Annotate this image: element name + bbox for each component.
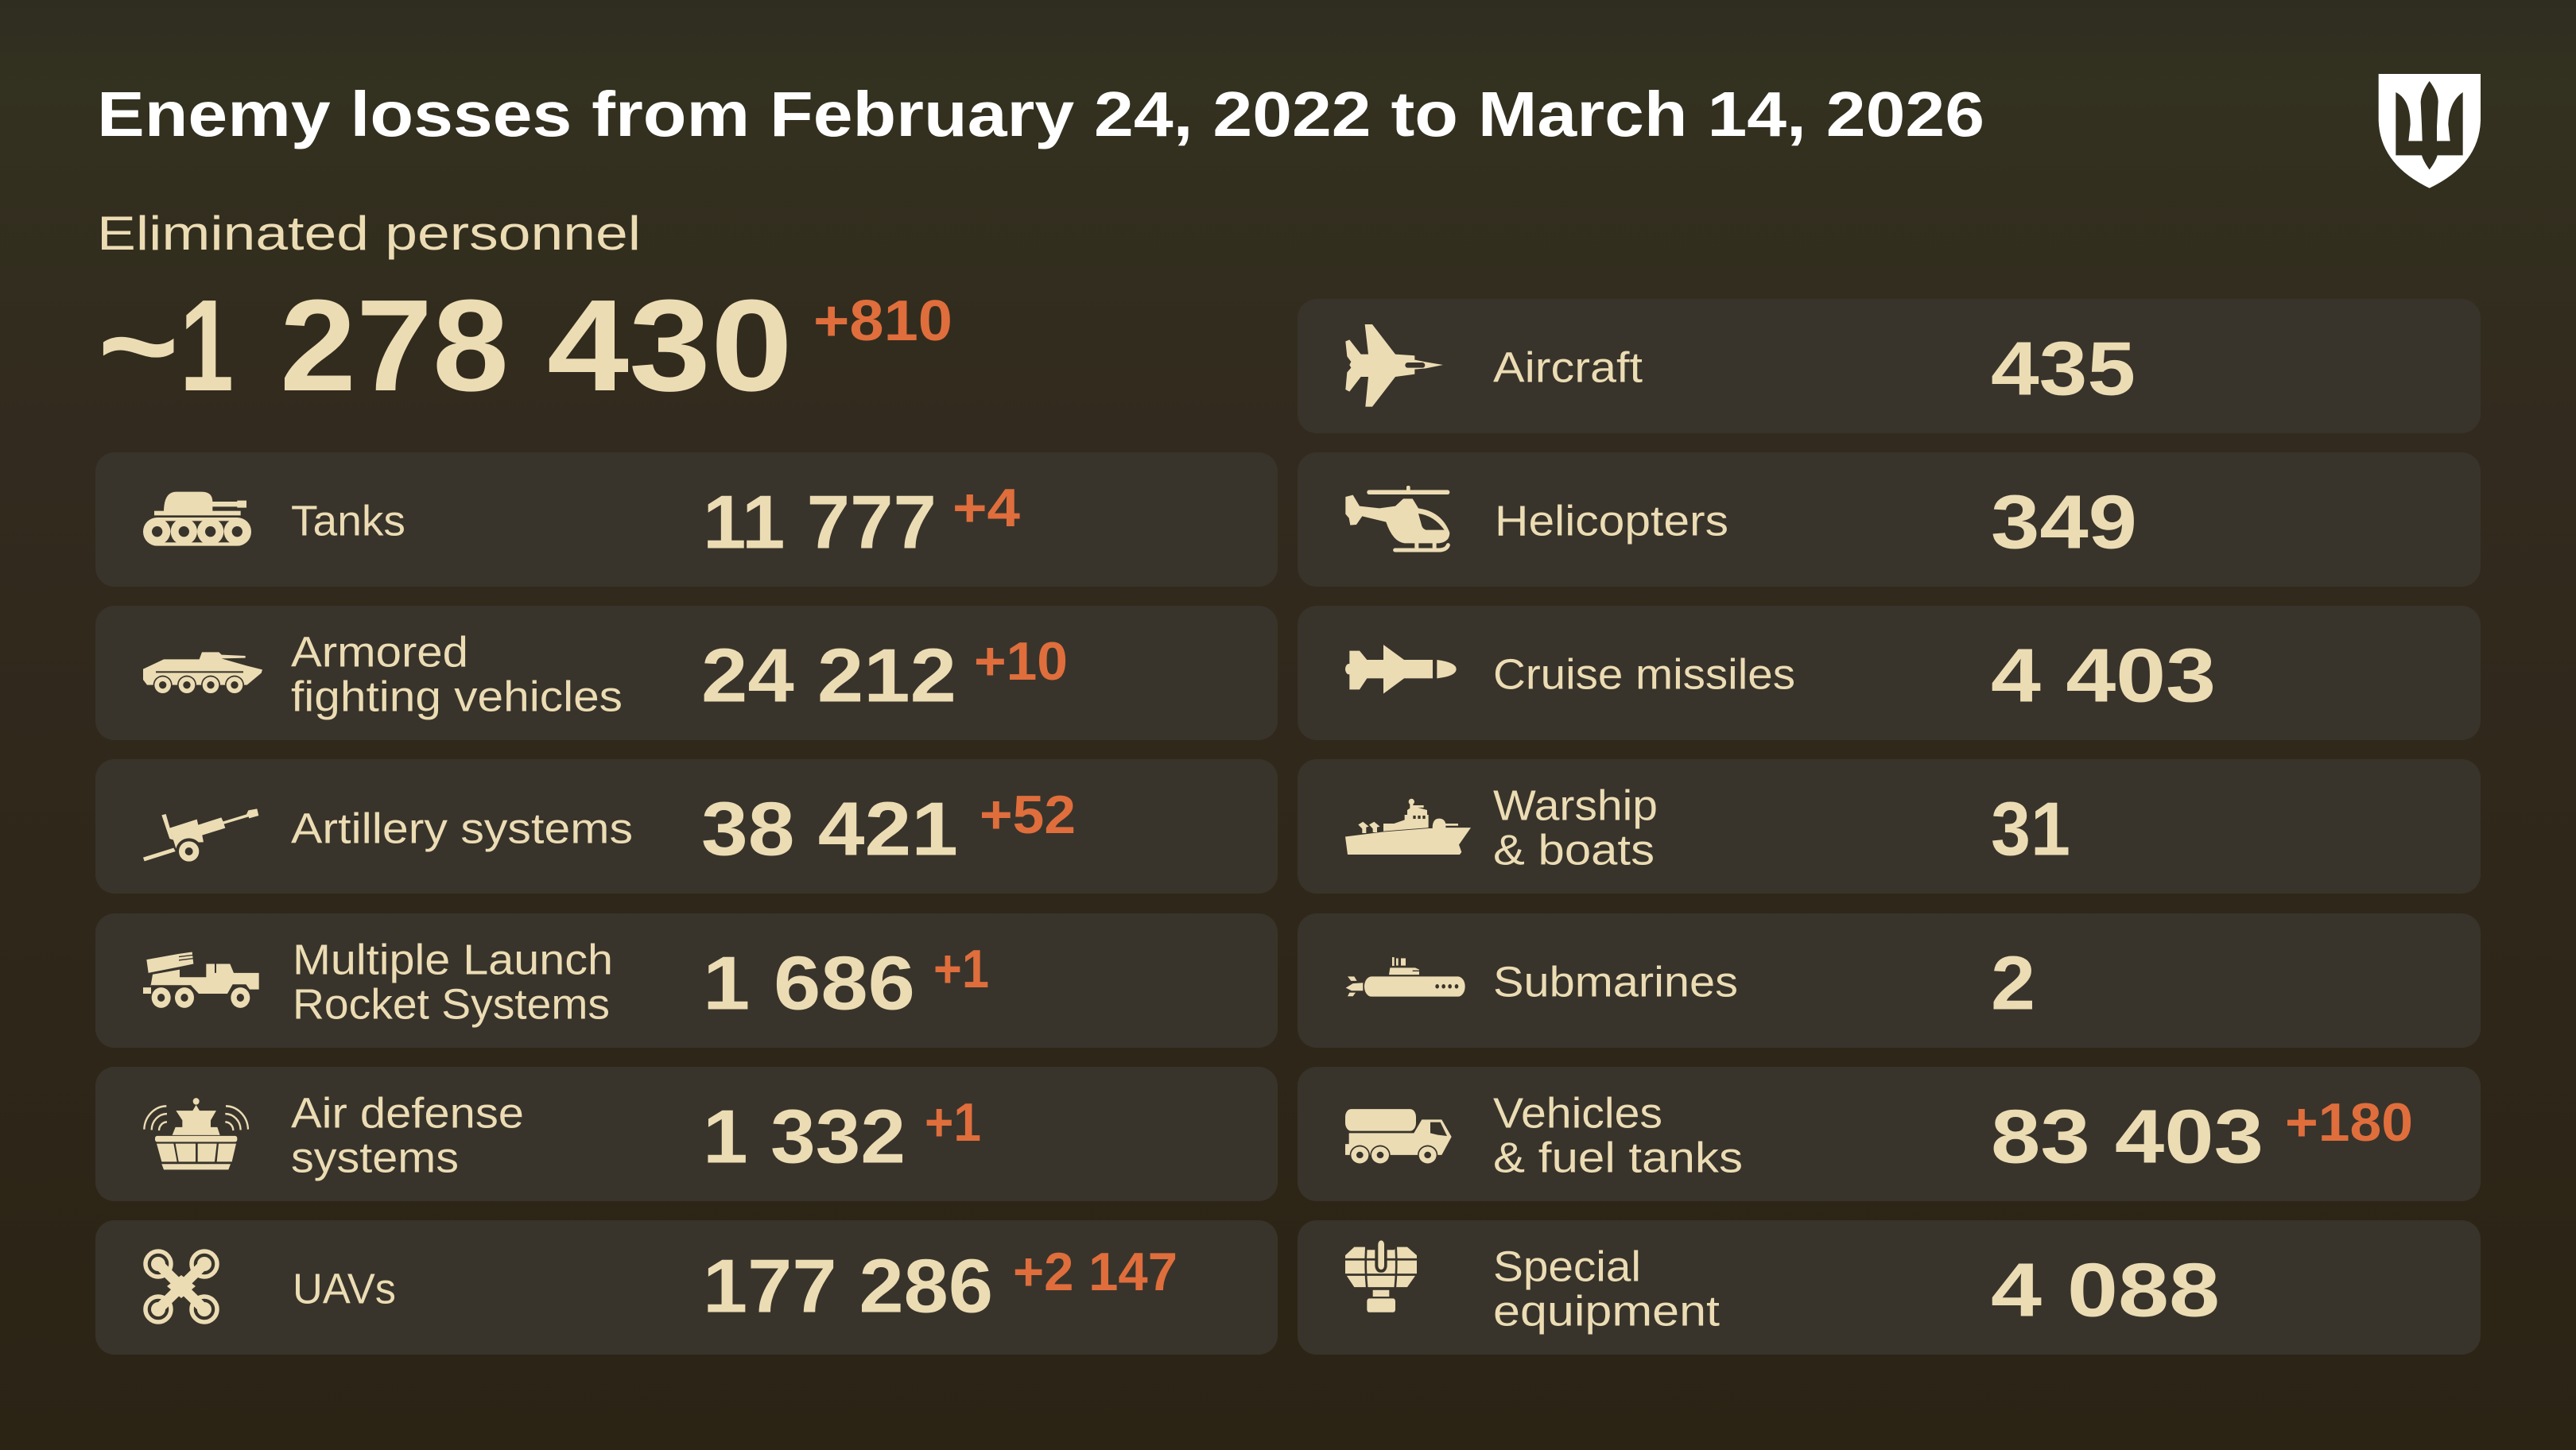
icon: artillery gun xyxy=(143,808,258,865)
personnel total: 278 xyxy=(280,273,509,418)
label: Aircraft xyxy=(1493,343,1643,391)
label xyxy=(291,1089,524,1181)
icon: fuel truck xyxy=(1345,1109,1452,1165)
label xyxy=(1493,1243,1720,1336)
icon: cruise missile xyxy=(1345,645,1457,694)
label: & boats xyxy=(1493,827,1655,874)
value: 1 332 xyxy=(703,1094,906,1180)
icon: rocket launcher truck xyxy=(143,952,259,1010)
value: 83 403 xyxy=(1991,1094,2264,1180)
value: 31 xyxy=(1991,787,2070,871)
icon: submarine xyxy=(1346,957,1465,997)
label xyxy=(293,936,613,1029)
personnel total: 430 xyxy=(547,273,793,418)
panel: air defense systems xyxy=(95,1067,1278,1201)
value: 1 686 xyxy=(703,941,915,1025)
logo: shield with trident xyxy=(2379,74,2481,188)
label: equipment xyxy=(1493,1288,1720,1336)
personnel total xyxy=(98,273,793,418)
panel: tanks xyxy=(95,452,1278,587)
personnel daily increase: +810 xyxy=(813,289,952,353)
value: 2 xyxy=(1991,941,2035,1025)
label: Warship xyxy=(1493,782,1658,830)
increase: +10 xyxy=(974,631,1068,692)
value: 4 088 xyxy=(1991,1248,2220,1332)
label: Air defense xyxy=(291,1089,524,1137)
label: UAVs xyxy=(293,1266,396,1313)
panel: UAVs xyxy=(95,1220,1278,1355)
label: fighting vehicles xyxy=(291,673,623,720)
label: Helicopters xyxy=(1495,498,1728,545)
icon: helicopter xyxy=(1345,486,1449,550)
personnel total: ~ xyxy=(98,273,179,418)
increase: +1 xyxy=(933,939,989,999)
icon: tank xyxy=(143,492,251,546)
value: 38 421 xyxy=(701,787,958,871)
increase: +1 xyxy=(925,1092,981,1153)
value: 177 286 xyxy=(703,1243,993,1329)
panel: cruise missiles xyxy=(1298,606,2481,740)
label xyxy=(291,628,623,720)
panel: warships and boats xyxy=(1298,759,2481,894)
personnel total: 1 xyxy=(180,273,234,418)
value: 24 212 xyxy=(701,633,956,719)
icon: warship xyxy=(1345,799,1471,855)
panel: submarines xyxy=(1298,913,2481,1048)
panel: special equipment xyxy=(1298,1220,2481,1355)
label: Special xyxy=(1493,1243,1641,1291)
panel: vehicles and fuel tanks xyxy=(1298,1067,2481,1201)
label: Rocket Systems xyxy=(293,981,610,1029)
value: 4 403 xyxy=(1991,633,2216,719)
increase: +2 147 xyxy=(1013,1242,1177,1302)
label: Artillery systems xyxy=(291,804,633,852)
label: Multiple Launch xyxy=(293,936,613,984)
label: Tanks xyxy=(291,498,405,545)
title: Enemy losses from February 24, 2022 to March 14, 2026 xyxy=(97,79,1984,149)
increase: +180 xyxy=(2285,1092,2413,1153)
increase: +52 xyxy=(980,785,1076,845)
label: Submarines xyxy=(1493,959,1738,1006)
value: 349 xyxy=(1991,480,2137,564)
label: systems xyxy=(291,1134,459,1181)
label xyxy=(1493,782,1658,874)
icon: air defense xyxy=(144,1098,248,1169)
label: Cruise missiles xyxy=(1493,650,1795,698)
icon: special equipment xyxy=(1345,1240,1417,1312)
value: 11 777 xyxy=(703,480,937,564)
icon: drone xyxy=(145,1251,217,1322)
label: Vehicles xyxy=(1493,1089,1662,1137)
icon: fighter jet xyxy=(1345,324,1443,407)
panel: artillery systems xyxy=(95,759,1278,894)
icon: armored vehicle xyxy=(143,652,262,695)
value: 435 xyxy=(1991,326,2136,412)
label xyxy=(1493,1089,1743,1181)
panel: aircraft xyxy=(1298,299,2481,433)
panel: armored fighting vehicles xyxy=(95,606,1278,740)
personnel heading: Eliminated personnel xyxy=(97,207,641,260)
label: Armored xyxy=(291,628,468,676)
panel: multiple launch rocket systems xyxy=(95,913,1278,1048)
panel: helicopters xyxy=(1298,452,2481,587)
label: & fuel tanks xyxy=(1493,1134,1743,1181)
increase: +4 xyxy=(952,478,1020,538)
